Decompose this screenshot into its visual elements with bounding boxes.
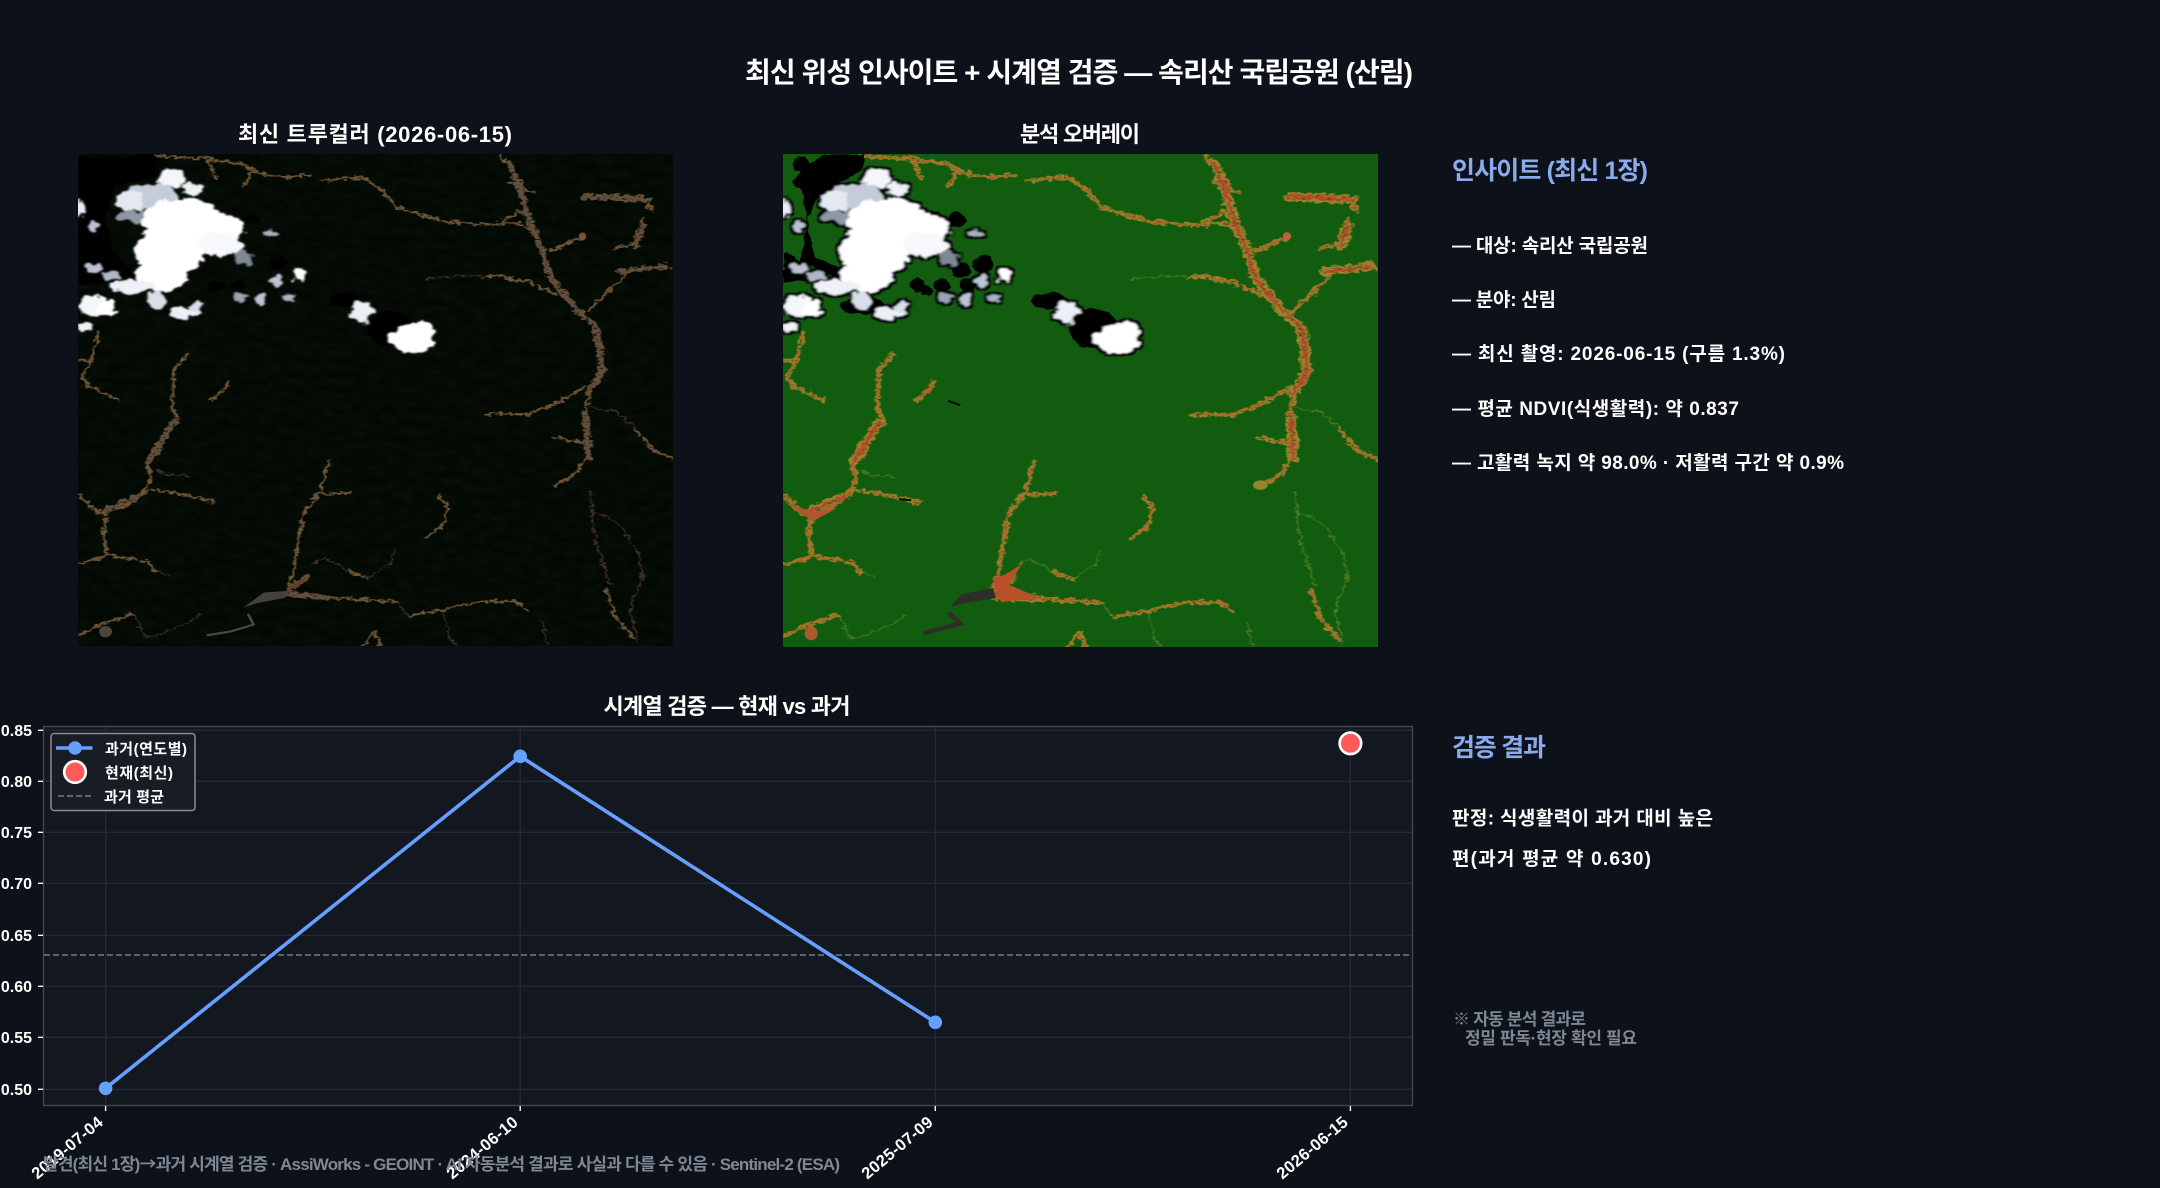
x axis labels bbox=[28, 1113, 1352, 1183]
insight line: capture date: — 최신 촬영: 2026-06-15 (구름 1.3%) bbox=[1452, 343, 1785, 365]
y axis labels: 0.60 bbox=[1, 979, 32, 996]
y axis labels: 0.55 bbox=[1, 1030, 32, 1047]
overlay: cloud shadow mask bbox=[783, 154, 1117, 348]
x axis labels: 2019-07-04 bbox=[28, 1113, 107, 1183]
y axis labels bbox=[1, 723, 32, 1099]
verdict text: 편(과거 평균 약 0.630) bbox=[1452, 848, 1651, 870]
legend: 현재(최신) bbox=[105, 765, 173, 782]
panel: insight text bbox=[1452, 157, 1844, 474]
true colour: reservoir bbox=[243, 591, 289, 607]
legend: 과거(연도별) bbox=[105, 741, 187, 758]
heading: verification: 검증 결과 bbox=[1452, 734, 1546, 762]
footer source note: 발견(최신 1장)→과거 시계열 검증 · AssiWorks - GEOINT · AI 자동분석 결과로 사실과 다를 수 있음 · Sentinel-2 (ESA) bbox=[43, 1150, 840, 1175]
legend: 과거 평균 bbox=[104, 789, 164, 806]
past mean dashed line bbox=[44, 954, 1412, 956]
legend bbox=[51, 734, 195, 810]
y axis labels: 0.75 bbox=[1, 825, 32, 842]
line chart bbox=[1, 723, 1412, 1183]
panel: verification result bbox=[1452, 734, 1713, 1048]
note: ※ 자동 분석 결과로 bbox=[1453, 1010, 1586, 1029]
heading: analysis overlay: 분석 오버레이 bbox=[1020, 122, 1140, 147]
y axis labels: 0.80 bbox=[1, 774, 32, 791]
y axis labels: 0.70 bbox=[1, 876, 32, 893]
x axis labels: 2026-06-15 bbox=[1273, 1113, 1352, 1183]
y axis labels: 0.50 bbox=[1, 1082, 32, 1099]
past series line bbox=[99, 750, 942, 1095]
y axis labels: 0.85 bbox=[1, 723, 32, 740]
overlay: reservoir mask bbox=[785, 232, 1291, 640]
panel: true colour satellite image bbox=[78, 154, 673, 646]
insight line: NDVI: — 평균 NDVI(식생활력): 약 0.837 bbox=[1452, 398, 1739, 420]
insight line: sector: — 분야: 산림 bbox=[1452, 289, 1556, 311]
y axis labels: 0.65 bbox=[1, 928, 32, 945]
panel: analysis overlay image bbox=[783, 154, 1378, 647]
x axis labels: 2024-06-10 bbox=[443, 1113, 522, 1183]
heading: true colour image: 최신 트루컬러 (2026-06-15) bbox=[238, 122, 512, 147]
title: 최신 위성 인사이트 + 시계열 검증 — 속리산 국립공원 (산림) bbox=[745, 57, 1413, 88]
insight line: target: — 대상: 속리산 국립공원 bbox=[1452, 235, 1648, 257]
verdict text: 판정: 식생활력이 과거 대비 높은 bbox=[1452, 808, 1713, 830]
chart title: 시계열 검증 — 현재 vs 과거 bbox=[604, 694, 850, 719]
insight line: coverage: — 고활력 녹지 약 98.0% · 저활력 구간 약 0.9% bbox=[1452, 452, 1844, 474]
note: 정밀 판독·현장 확인 필요 bbox=[1465, 1029, 1637, 1048]
heading: insight: 인사이트 (최신 1장) bbox=[1452, 157, 1648, 185]
x axis labels: 2025-07-09 bbox=[858, 1113, 937, 1183]
current point marker bbox=[1340, 732, 1361, 754]
